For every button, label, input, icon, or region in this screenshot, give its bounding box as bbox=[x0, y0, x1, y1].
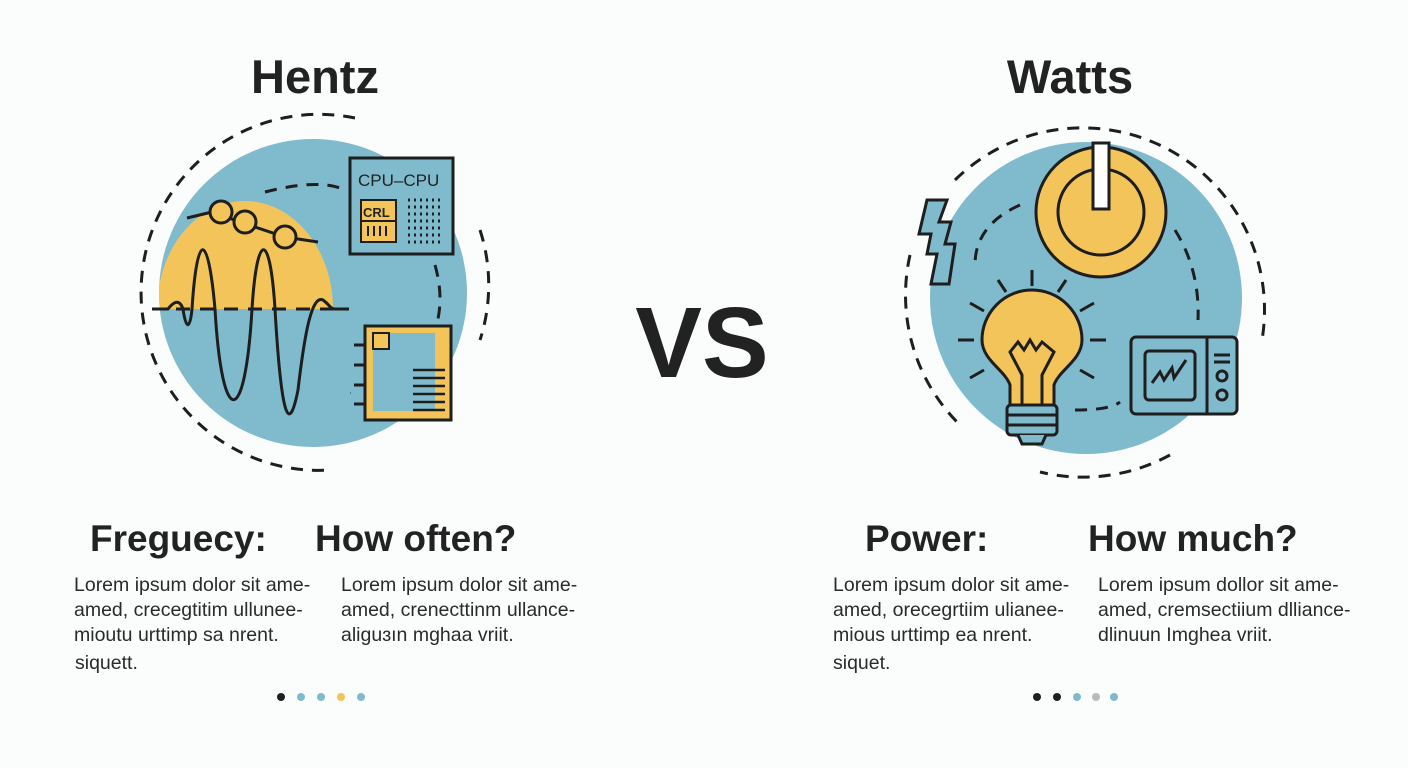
left dots bbox=[277, 693, 365, 701]
power button bbox=[1036, 147, 1166, 277]
left body text col 1: siquett. bbox=[75, 652, 138, 674]
wave bbox=[152, 250, 349, 414]
text: How often? bbox=[315, 518, 516, 559]
right body text col 1: amed, orecegrtiim ulianee- bbox=[833, 599, 1064, 621]
CPU box: CPU–CPU bbox=[358, 171, 439, 190]
left subheading: Freguecy: bbox=[90, 518, 267, 559]
right body text col 1: Lorem ipsum dolor sit ame- bbox=[833, 574, 1069, 596]
CPU box bbox=[350, 158, 453, 254]
beads bbox=[187, 201, 318, 248]
VS label: VS bbox=[635, 287, 769, 399]
CPU box: CRL bbox=[363, 205, 390, 220]
left body text col 1: mioutu urttimp sa nrent. bbox=[74, 624, 279, 646]
left body text col 2: amed, crenecttinm ullance- bbox=[341, 599, 575, 621]
left body text col 1: amed, crecegtitim ullunee- bbox=[74, 599, 303, 621]
microwave bbox=[1131, 337, 1237, 414]
text: How much? bbox=[1088, 518, 1298, 559]
right body text col 1: siquet. bbox=[833, 652, 890, 674]
left body text col 2 bbox=[341, 574, 577, 646]
title: Watts: Watts bbox=[1007, 50, 1133, 103]
right dots bbox=[1033, 693, 1118, 701]
right body text col 2: Lorem ipsum dollor sit ame- bbox=[1098, 574, 1339, 596]
bulb bbox=[958, 270, 1106, 444]
lightning bbox=[919, 200, 955, 284]
right body text col 1: mious urttimp ea nrent. bbox=[833, 624, 1032, 646]
yellow half disc bbox=[157, 201, 333, 417]
illustration: power bbox=[906, 128, 1265, 477]
chip bbox=[354, 326, 451, 420]
right body text col 2 bbox=[1098, 574, 1351, 646]
left body text col 2: Lorem ipsum dolor sit ame- bbox=[341, 574, 577, 596]
right subheading: Power: bbox=[865, 518, 988, 559]
illustration: frequency bbox=[141, 114, 489, 470]
right body text col 2: dlinuun Imghea vriit. bbox=[1098, 624, 1273, 646]
left body text col 1 bbox=[74, 574, 310, 674]
left body text col 2: aliguɜın mghaa vriit. bbox=[341, 624, 514, 646]
left body text col 1: Lorem ipsum dolor sit ame- bbox=[74, 574, 310, 596]
right body text col 2: amed, cremsectiium dlliance- bbox=[1098, 599, 1351, 621]
title: Hentz: Hentz bbox=[251, 50, 379, 103]
right body text col 1 bbox=[833, 574, 1069, 674]
